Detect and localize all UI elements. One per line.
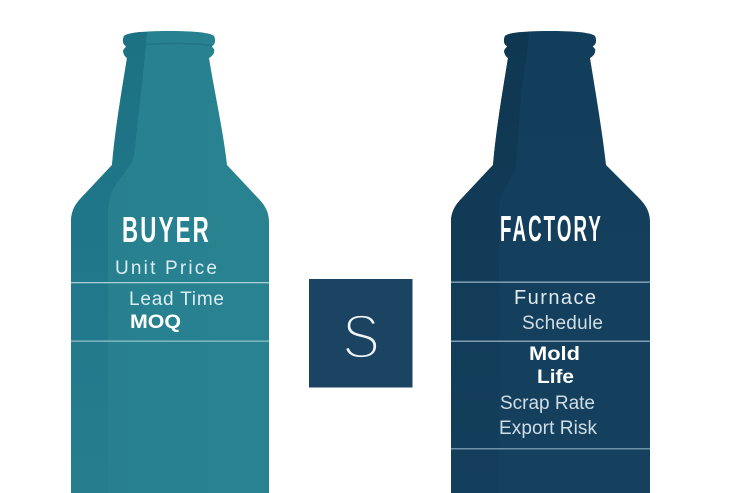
square background [309, 279, 412, 388]
bottle lip shadow: buyer [145, 43, 212, 46]
versus square [309, 279, 412, 388]
bottle: buyer [71, 31, 269, 493]
label: scrap rate: Scrap Rate [500, 393, 595, 414]
bottle silhouette: factory [451, 31, 650, 493]
title: factory: FACTORY [500, 210, 603, 250]
label: lead time: Lead Time [129, 289, 224, 310]
bottle shaded facet: buyer [71, 32, 147, 493]
label: export risk: Export Risk [499, 418, 598, 439]
bottle shaded facet: factory [451, 32, 529, 493]
title: buyer: BUYER [122, 211, 211, 250]
bottle: factory [451, 31, 650, 493]
label: unit price: Unit Price [115, 258, 217, 279]
letter s: S [342, 303, 380, 372]
divider: factory middle [451, 340, 650, 342]
divider: buyer bottom [71, 340, 269, 342]
divider: factory bottom [451, 448, 650, 450]
label: moq: MOQ [130, 312, 181, 333]
label: mold: Mold [529, 344, 580, 365]
label: life: Life [537, 367, 574, 388]
bottle silhouette: buyer [71, 31, 269, 493]
divider: factory top [451, 282, 650, 283]
label: schedule: Schedule [522, 313, 603, 334]
divider: buyer top [71, 282, 269, 283]
label: furnace: Furnace [514, 287, 596, 309]
